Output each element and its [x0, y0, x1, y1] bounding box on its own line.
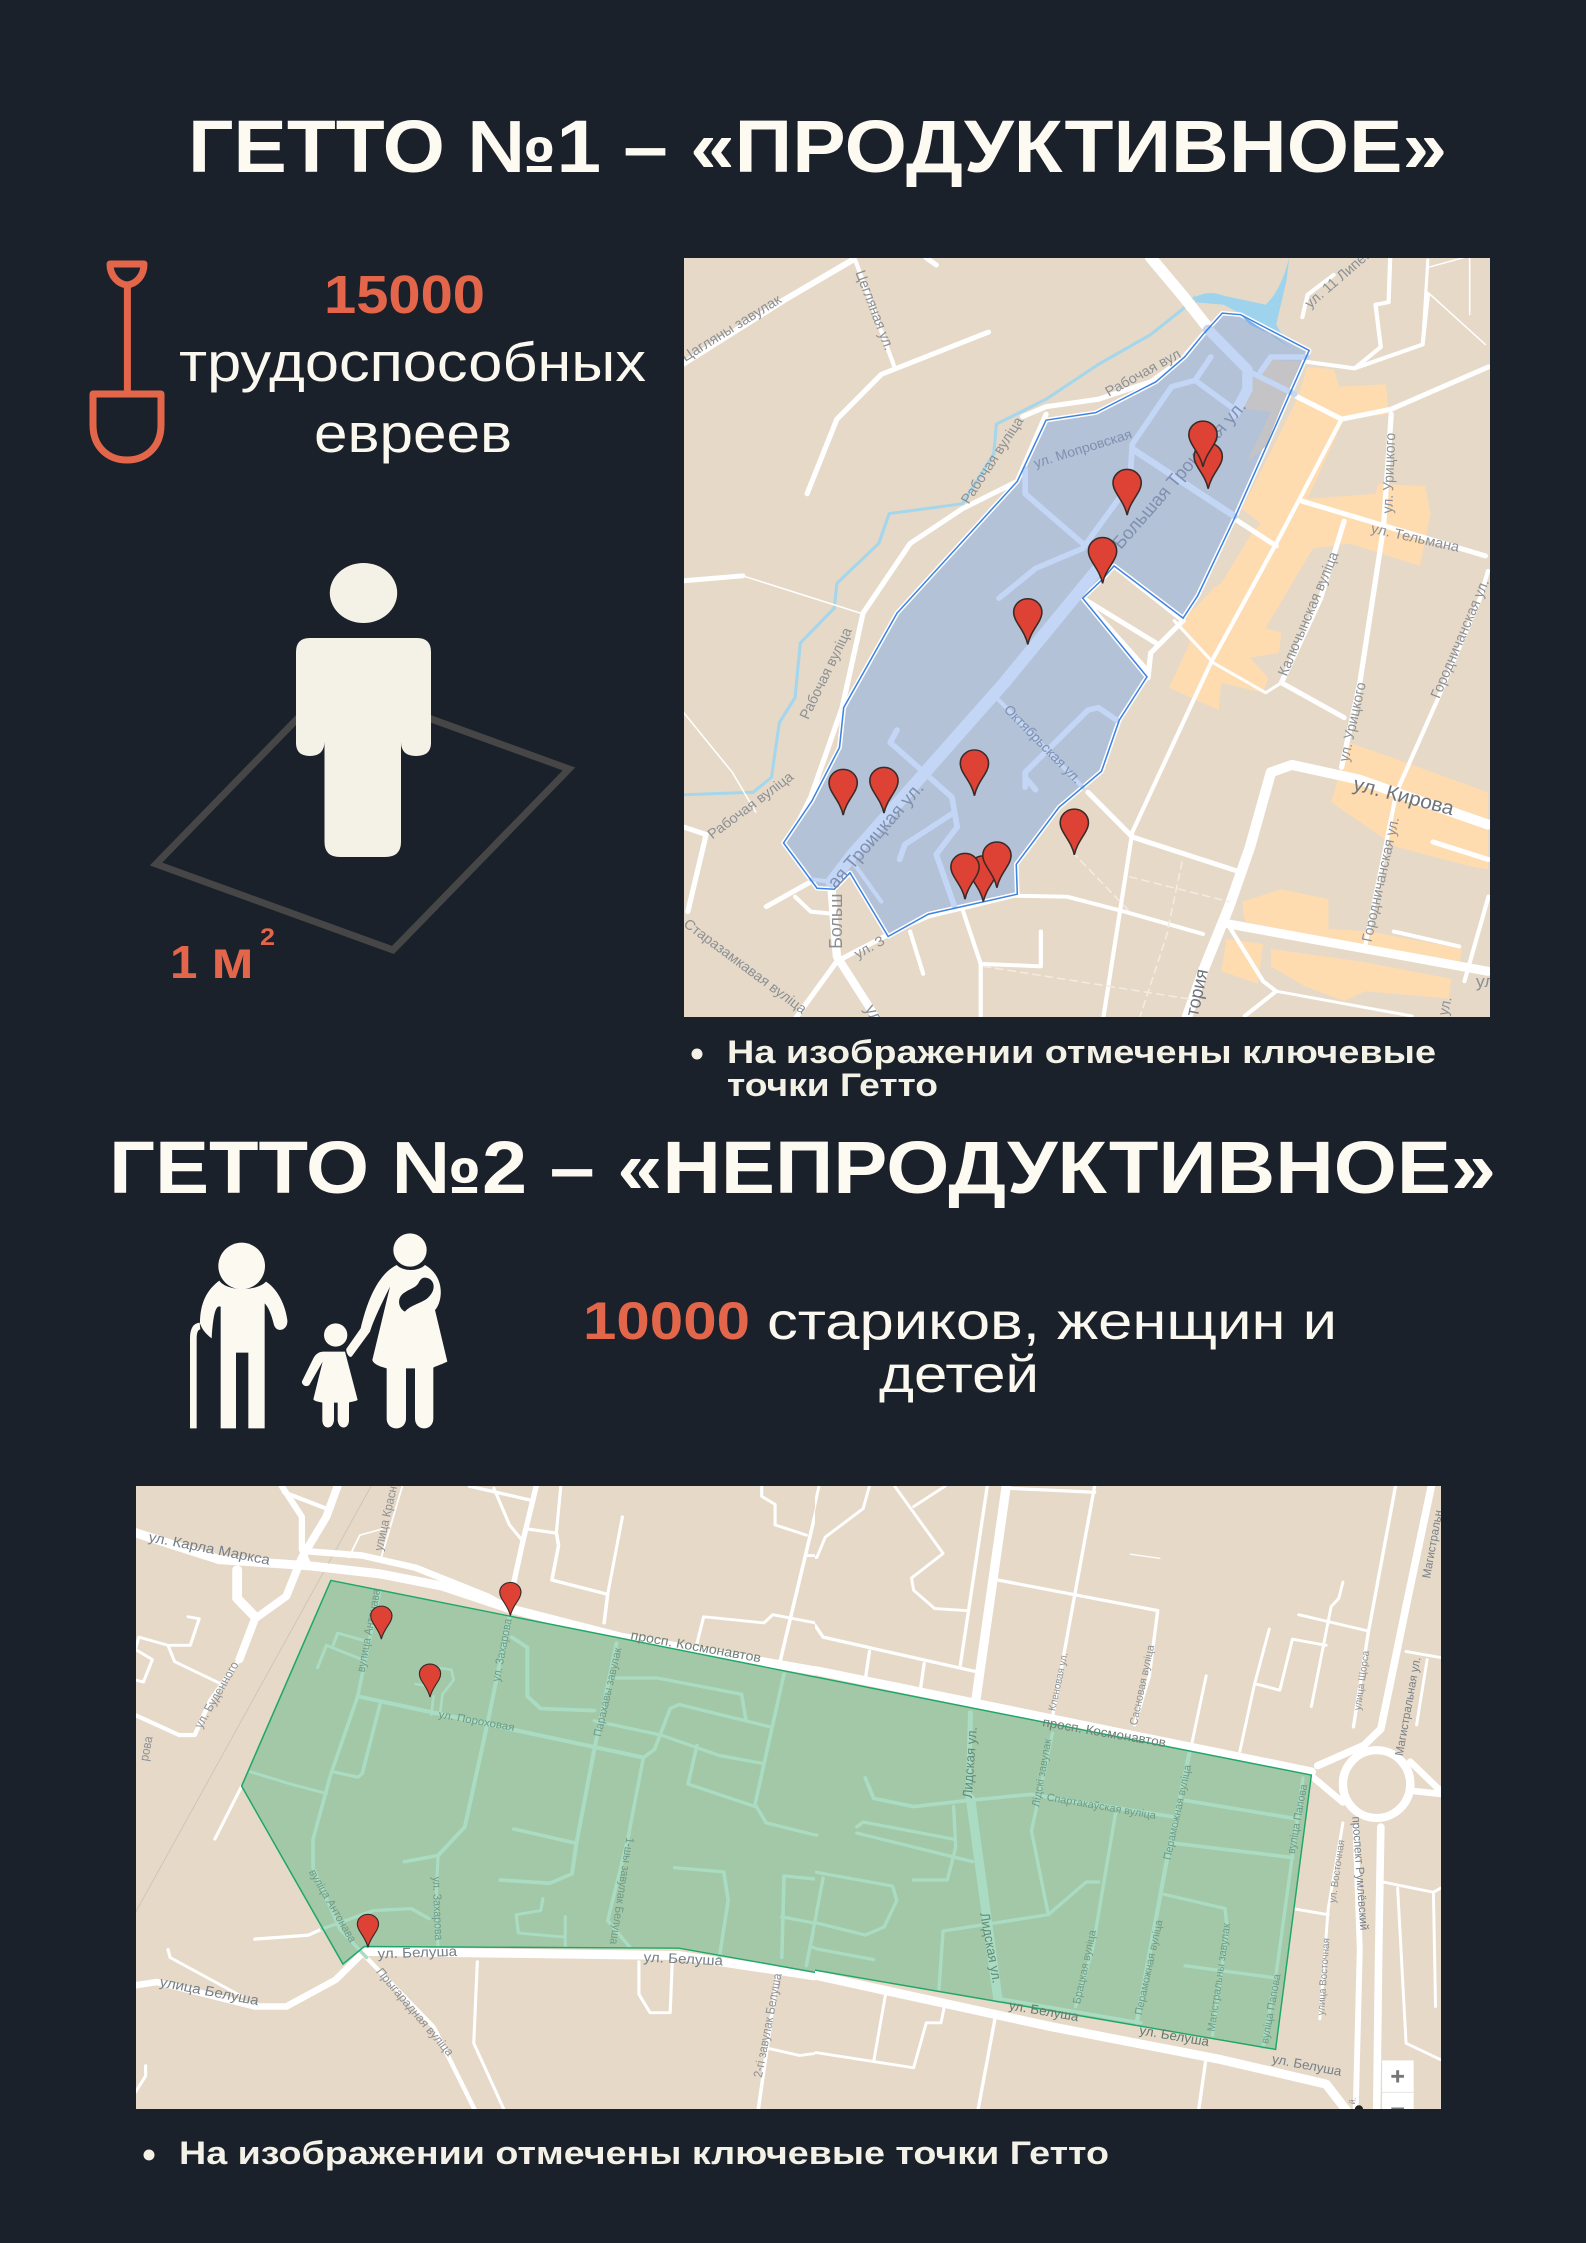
map 1 water	[684, 257, 1289, 795]
map 2 eastern part: Сасновая вуліца	[1128, 1644, 1157, 1726]
map 2 eastern part: ул. Восточная	[1327, 1839, 1347, 1904]
map 2 eastern part: проспект Румлёвский	[1349, 1816, 1371, 1931]
map 2 eastern part: Кленовая ул.	[1047, 1652, 1071, 1712]
map 2 western part: ул. Белуша	[643, 1950, 724, 1969]
map 2 western part: 2-гі завулак Белуша	[750, 1972, 785, 2078]
map 2 eastern part: улица Восточная	[1316, 1938, 1333, 2016]
map 2 eastern part: Лідскі завулак	[1030, 1738, 1054, 1808]
note: ghetto 1 map caption: точки Гетто	[727, 1067, 938, 1103]
map 2 eastern part: Магистральн	[1420, 1509, 1445, 1579]
map 1 street labels: ул. З	[852, 933, 888, 962]
map 1 street labels: Калючынская вуліца	[1275, 550, 1343, 678]
map 1 street labels: Рабочая вул	[1103, 346, 1184, 400]
map 1 streets	[684, 257, 1488, 1026]
label: 1 square metre: 2	[260, 924, 275, 951]
map 2 eastern part: вуліца Папова	[1259, 1973, 1284, 2045]
map 1 residential zones	[1169, 367, 1488, 1001]
map 2 eastern part	[792, 1480, 1460, 2120]
title: ghetto 1: ГЕТТО №1 – «ПРОДУКТИВНОЕ»	[188, 105, 1447, 188]
map 1 street labels: ул. Кирова	[1351, 774, 1457, 820]
map 1 street labels: Цагляны завулак	[679, 292, 785, 365]
title: ghetto 2: ГЕТТО №2 – «НЕПРОДУКТИВНОЕ»	[109, 1126, 1496, 1209]
map 1 street labels	[679, 241, 1495, 1026]
map 1 street labels: ул. 11 Липеня	[1302, 241, 1382, 312]
roundabout	[1343, 1750, 1410, 1818]
map zoom control	[1382, 2060, 1414, 2113]
map 1 ghetto area polygon	[784, 313, 1309, 936]
map 2 eastern part: вуліца Папова	[1286, 1783, 1310, 1855]
icon: shovel	[93, 264, 161, 460]
map 1 street labels: Городничанская ул.	[1428, 577, 1493, 701]
map 2 eastern part: Лидская ул.	[960, 1726, 980, 1799]
map 1 street labels: Большая Троицкая ул.	[1108, 396, 1250, 552]
map 2 western part: ул. Захарова	[430, 1876, 445, 1941]
map 1 street labels: Октябрьская ул.	[1001, 702, 1085, 786]
map 2 western part: вулица Антонава	[355, 1587, 384, 1673]
stat: 10000 elderly, women and children	[583, 1292, 1337, 1404]
map 2 western part: ул. Буденного	[191, 1659, 242, 1730]
map 2 eastern part: улица Щорса	[1353, 1650, 1372, 1711]
note: ghetto 1 map caption: На изображении отмечены ключевые	[727, 1034, 1436, 1070]
map 1 street labels: Рабочая вуліца	[797, 625, 856, 722]
map 1 markers	[829, 421, 1222, 902]
stat: 15000 able-bodied: трудоспособных	[179, 331, 646, 393]
icon: elderly man, child and woman with baby	[193, 1233, 447, 1428]
map 2 western part: ул. Пороховая	[437, 1709, 516, 1734]
map 2 western part: ул. Белуша	[377, 1944, 458, 1962]
stat: 10000 elderly, women and children: 10000	[583, 1292, 750, 1351]
map 2 western part: вуліца Антонава	[306, 1868, 359, 1945]
map 2 eastern part: Магистральная ул.	[1393, 1656, 1424, 1757]
map 2 eastern part: Пераможная вуліца	[1161, 1764, 1194, 1861]
map 2 eastern part: Лидская ул.	[977, 1911, 1005, 1984]
map 2 western part	[130, 1478, 844, 2120]
map 1 street labels: Цегляная ул.	[851, 268, 897, 353]
map: ghetto 2	[130, 1478, 1460, 2120]
stat: 10000 elderly, women and children: стариков, женщин и	[767, 1293, 1337, 1351]
map 1 street labels: ул. Мопровская	[1032, 427, 1134, 471]
map 1 street labels: Рабочая вуліца	[705, 769, 797, 843]
map 2 eastern part: ул. Белуша	[1271, 2051, 1344, 2079]
map 2 eastern part: Магістральны завулак	[1206, 1922, 1233, 2032]
map 2 eastern part: Спартакаўская вуліца	[1046, 1792, 1157, 1822]
map 2 eastern part: Пераможная вуліца	[1133, 1919, 1166, 2016]
stat: 15000 able-bodied	[179, 265, 646, 464]
map 2 eastern part: ул. Белуша	[1008, 1998, 1080, 2024]
map 1 street labels: ул. Тельмана	[1369, 521, 1461, 556]
map 1 street labels: тория	[1181, 967, 1212, 1018]
map 2 ghetto area polygon east	[792, 1672, 1311, 2049]
map 1 street labels: Больш	[825, 893, 846, 949]
map 2 western part: улица Красно	[371, 1478, 402, 1552]
map 1 street labels: ая Троицкая ул.	[822, 778, 928, 892]
map 1 street labels: ул.	[1436, 995, 1456, 1017]
map: ghetto 1	[679, 241, 1500, 1030]
map 2 eastern part: Брацкая вуліца	[1071, 1929, 1099, 2005]
label: 1 square metre: 1 м	[170, 930, 254, 990]
map 2 western part: ул. Карла Маркса	[147, 1530, 272, 1569]
note: ghetto 2 map caption: На изображении отмечены ключевые точки Гетто	[179, 2135, 1109, 2171]
note: ghetto 1 map caption	[692, 1034, 1436, 1103]
map 2 western part: ул. Захарова	[490, 1617, 515, 1683]
stat: 15000 able-bodied: евреев	[314, 402, 512, 464]
map 1 street labels: ул. Урицкого	[1380, 433, 1399, 514]
map 2 eastern part: й.	[1347, 2096, 1358, 2105]
map 1 street labels: Рабочая вуліца	[958, 414, 1027, 507]
map 2 western part: Парахавы завулак	[592, 1647, 625, 1738]
map 1 street labels: Городничанская ул.	[1359, 816, 1403, 943]
map 2 western part: рова	[137, 1735, 156, 1762]
map 2 western part: Прыгарадная вуліца	[373, 1965, 457, 2059]
map 2 western part: просп. Космонавтов	[629, 1628, 762, 1665]
icon: person standing	[296, 563, 431, 857]
map 1 street labels: ул. Урицкого	[1336, 681, 1370, 763]
stat: 10000 elderly, women and children: детей	[879, 1346, 1039, 1404]
map 2 western part: улица Белуша	[158, 1975, 261, 2009]
map 2 ghetto area polygon west	[242, 1580, 844, 1978]
map 2 eastern part: ул. Белуша	[1138, 2023, 1211, 2049]
stat: 15000 able-bodied: 15000	[324, 265, 485, 325]
icon: square metre outline	[156, 683, 569, 950]
map 1 street labels: ул	[1476, 972, 1495, 991]
map 2 eastern part: просп. Космонавтов	[1041, 1714, 1167, 1750]
map 1 street labels: Старазамкавая вуліца	[680, 916, 810, 1017]
map 1 street labels: ул	[861, 1001, 888, 1026]
map 2 western part: 1-шы завулак Белуша	[607, 1837, 636, 1946]
